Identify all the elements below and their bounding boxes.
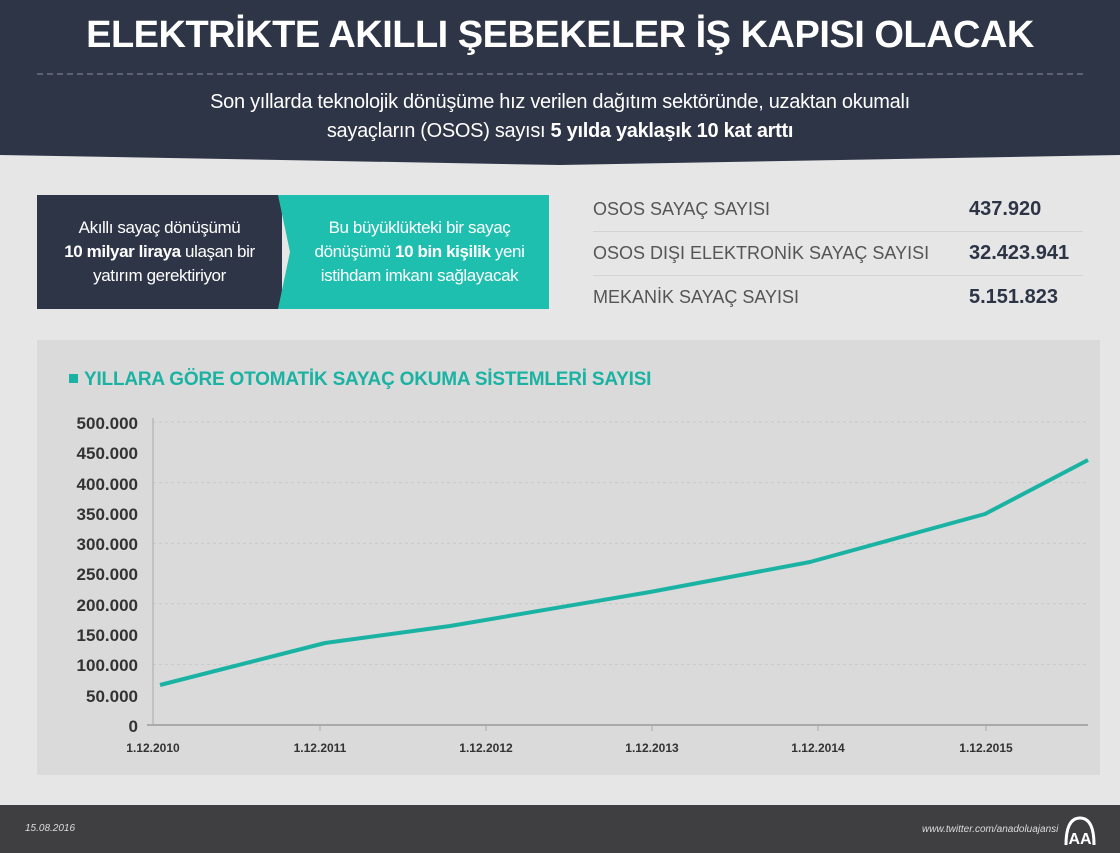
subtitle <box>210 91 910 142</box>
line chart: 300.000 <box>77 535 138 554</box>
callout: employment: Bu büyüklükteki bir sayaç <box>329 218 510 237</box>
stat: osos: OSOS SAYAÇ SAYISI <box>593 198 770 218</box>
line chart: 1.12.2013 <box>625 741 679 755</box>
footer <box>0 805 1120 853</box>
callout: investment <box>37 195 282 309</box>
callout: employment: dönüşümü 10 bin kişilik yeni <box>315 242 524 261</box>
line chart: 500.000 <box>77 414 138 433</box>
callout: employment: istihdam imkanı sağlayacak <box>321 266 518 285</box>
stat: electronic: OSOS DIŞI ELEKTRONİK SAYAÇ SAYISI <box>593 243 929 263</box>
line chart: 450.000 <box>77 444 138 463</box>
line chart: 150.000 <box>77 626 138 645</box>
header background <box>0 0 1120 165</box>
callout: investment: yatırım gerektiriyor <box>93 266 226 285</box>
date: 15.08.2016 <box>25 823 75 834</box>
line chart: 50.000 <box>86 687 138 706</box>
line chart: 400.000 <box>77 475 138 494</box>
title: ELEKTRİKTE AKILLI ŞEBEKELER İŞ KAPISI OLACAK <box>86 14 1034 56</box>
subtitle: sayaçların (OSOS) sayısı 5 yılda yaklaşık 10 kat arttı <box>327 120 793 142</box>
line chart: 1.12.2010 <box>126 741 180 755</box>
line chart <box>76 414 1089 755</box>
chart heading: YILLARA GÖRE OTOMATİK SAYAÇ OKUMA SİSTEMLERİ SAYISI <box>84 369 651 390</box>
callout: investment: Akıllı sayaç dönüşümü <box>79 218 240 237</box>
stat: electronic <box>593 231 1083 275</box>
subtitle: Son yıllarda teknolojik dönüşüme hız verilen dağıtım sektöründe, uzaktan okumalı <box>210 91 910 113</box>
line chart: 100.000 <box>77 656 138 675</box>
stat: mechanical: 5.151.823 <box>969 286 1058 308</box>
icon: AA logo <box>1064 816 1096 847</box>
callout: employment <box>278 195 549 309</box>
stat: mechanical <box>593 275 1083 319</box>
line chart: 250.000 <box>77 565 138 584</box>
stat: mechanical: MEKANİK SAYAÇ SAYISI <box>593 287 799 307</box>
stat: electronic: 32.423.941 <box>969 242 1069 264</box>
line chart: 350.000 <box>77 505 138 524</box>
line chart: 1.12.2015 <box>959 741 1013 755</box>
panel: chart <box>37 340 1100 775</box>
twitter handle: www.twitter.com/anadoluajansi <box>922 824 1058 835</box>
stat: osos: 437.920 <box>969 198 1041 220</box>
callout: investment: 10 milyar liraya ulaşan bir <box>64 242 255 261</box>
line chart: 200.000 <box>77 596 138 615</box>
stats table <box>593 198 1083 308</box>
line chart: 1.12.2012 <box>459 741 513 755</box>
line chart: 1.12.2011 <box>294 741 347 755</box>
line chart: 1.12.2014 <box>791 741 845 755</box>
line chart: 0 <box>129 717 138 736</box>
stat: osos <box>593 198 1041 220</box>
